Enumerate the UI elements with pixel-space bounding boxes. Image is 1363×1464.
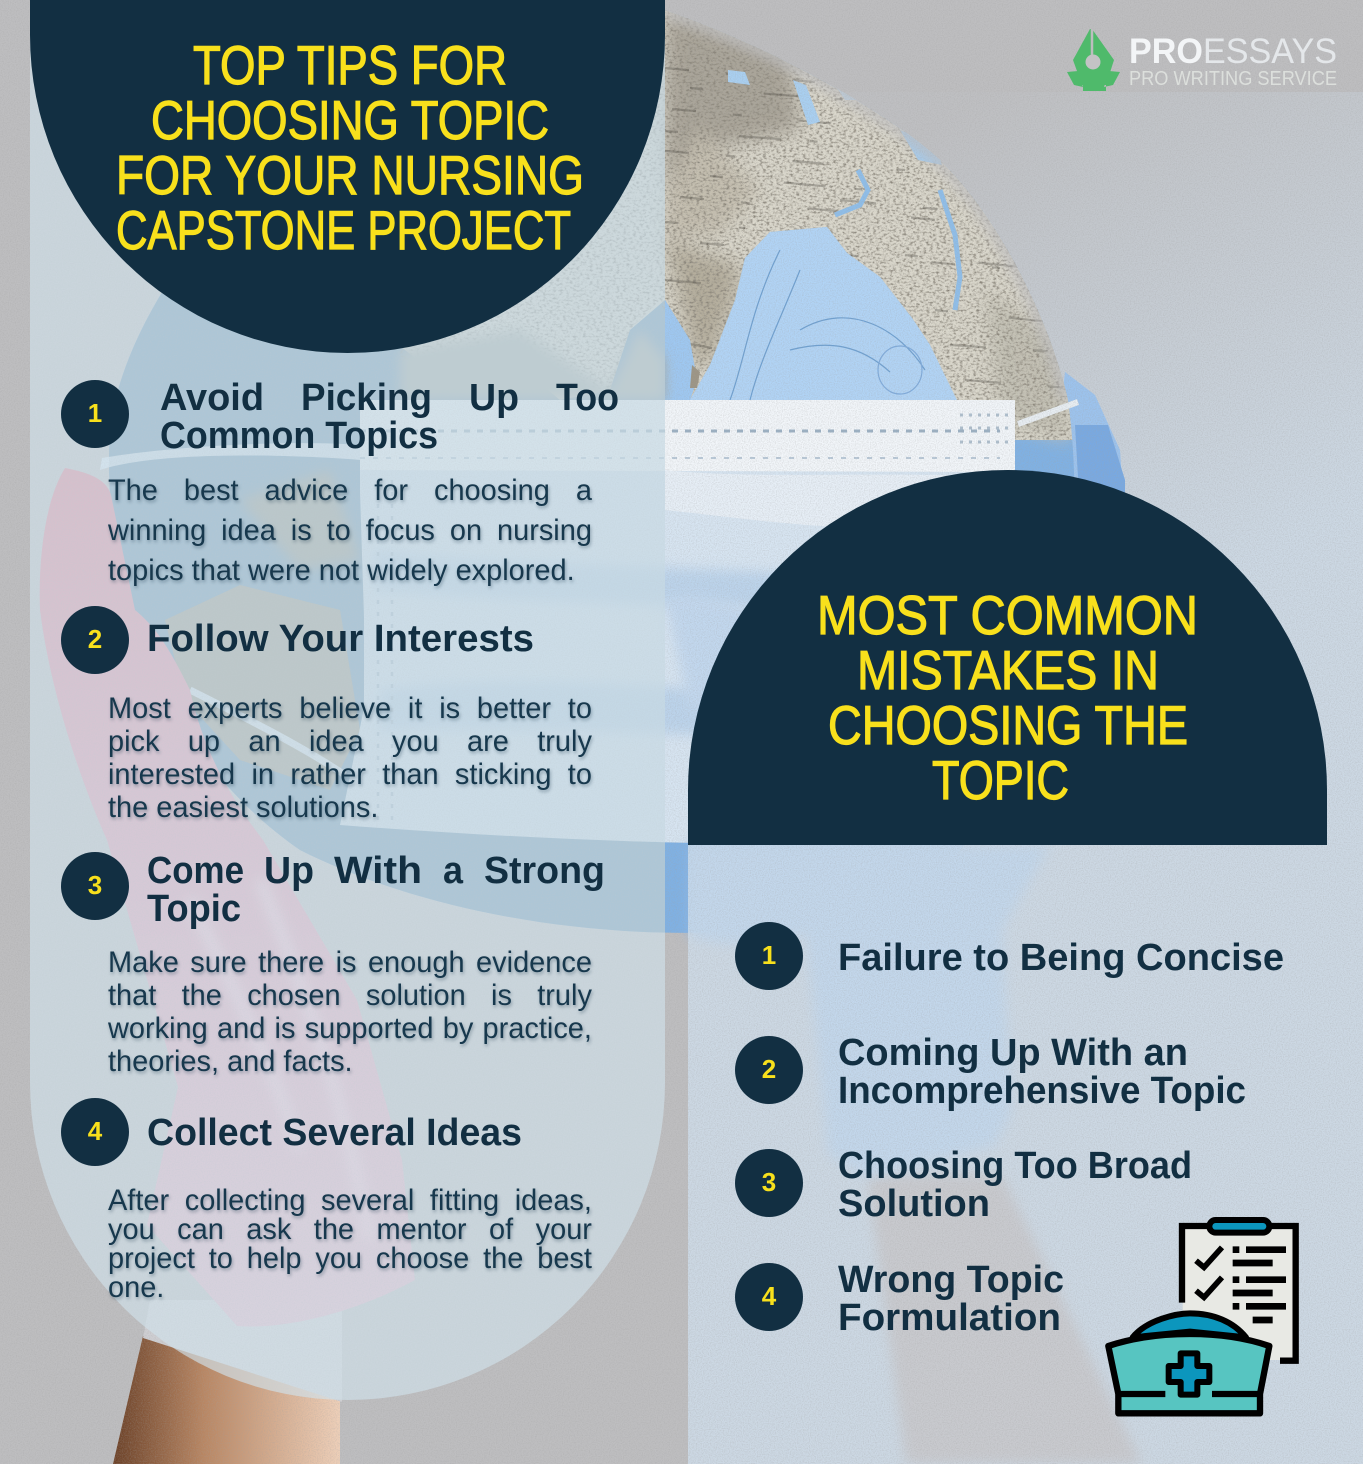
tip 3 [61, 850, 605, 1078]
tip 1 text: winning idea is to focus on nursing [108, 514, 592, 547]
tip 3 text: theories, and facts. [108, 1045, 353, 1078]
mistake 2 [735, 1032, 1246, 1112]
mistake 3: Solution [838, 1183, 990, 1225]
mistake 4: 4 [762, 1281, 777, 1311]
tip 4 number badge [61, 1098, 129, 1166]
tip 4 text: project to help you choose the best [108, 1242, 592, 1275]
tip 1 heading: Common Topics [160, 415, 438, 457]
heading: common mistakes title: CHOOSING THE [828, 694, 1188, 756]
tip 2 [61, 606, 594, 824]
tip 3 text [108, 946, 594, 1078]
tip 2 text: interested in rather than sticking to [108, 758, 592, 791]
tip 2 text: the easiest solutions. [108, 791, 378, 824]
mistake 1: 1 [762, 940, 776, 970]
right glove [689, 845, 1050, 1178]
heading: top tips title: CAPSTONE PROJECT [116, 199, 571, 261]
heading: top tips title: TOP TIPS FOR [193, 34, 507, 96]
tip 1 text: topics that were not widely explored. [108, 554, 575, 587]
tip 2 heading: Follow Your Interests [147, 618, 534, 660]
heading: common mistakes title [688, 470, 1327, 845]
mistake 1: Failure to Being Concise [838, 937, 1284, 979]
tip 3 heading [147, 850, 605, 930]
tip 3 heading: With [334, 850, 422, 892]
right column veil [688, 92, 1363, 1464]
mistake 3: 3 [762, 1167, 776, 1197]
tip 3 number badge: 3 [88, 870, 102, 900]
mistake 3 [735, 1145, 1192, 1225]
heading: top tips title: FOR YOUR NURSING [116, 144, 584, 206]
right forearm [867, 1175, 1142, 1464]
tip 3 number badge [61, 852, 129, 920]
globe above veil [688, 156, 1125, 732]
tip 2 number badge: 2 [88, 624, 102, 654]
tip 4 text: you can ask the mentor of your [108, 1213, 592, 1246]
tip 2 text [108, 692, 594, 824]
tip 4 heading: Collect Several Ideas [147, 1112, 522, 1154]
tip 3 heading: Come [147, 850, 244, 892]
logo nib [1067, 29, 1120, 91]
tip 3 heading: Topic [147, 888, 241, 930]
heading: common mistakes title: TOPIC [932, 749, 1069, 811]
heading: common mistakes title: MOST COMMON [817, 584, 1198, 646]
panel: common mistakes [688, 470, 1327, 1339]
tip 1 number badge [61, 380, 129, 448]
tip 3 text: that the chosen solution is truly [108, 979, 592, 1012]
tip 4 number badge: 4 [88, 1116, 103, 1146]
tip 1 heading [160, 377, 619, 457]
heading: top tips title: CHOOSING TOPIC [151, 89, 549, 151]
pink glove [40, 468, 415, 1327]
tip 3 heading: Strong [484, 850, 605, 892]
panel: top tips [30, 0, 665, 1400]
mistake 4: Wrong Topic [838, 1259, 1064, 1301]
mistake 2: Incomprehensive Topic [838, 1070, 1246, 1112]
tip 1 heading: Up [469, 377, 519, 419]
heading: top tips title [30, 0, 665, 353]
tip 4 [61, 1098, 594, 1304]
tip 4 text: one. [108, 1271, 164, 1304]
tip 3 heading: Up [264, 850, 314, 892]
logo tagline: PRO WRITING SERVICE [1129, 68, 1337, 90]
mistake 2: 2 [762, 1054, 776, 1084]
tip 1 heading: Picking [301, 377, 432, 419]
globe and mask [100, 0, 1130, 950]
tip 4 text [108, 1184, 594, 1304]
mistake 4 [735, 1259, 1064, 1339]
tip 1 text: The best advice for choosing a [108, 474, 592, 507]
tip 1 heading: Too [556, 377, 619, 419]
mistake 2: Coming Up With an [838, 1032, 1188, 1074]
tip 2 text: pick up an idea you are truly [108, 725, 592, 758]
tip 3 heading: a [443, 850, 464, 892]
forearm left [113, 1336, 340, 1464]
tip 1 heading: Avoid [160, 377, 264, 419]
mistake 3: Choosing Too Broad [838, 1145, 1192, 1187]
logo wordmark: PROESSAYS [1129, 32, 1337, 71]
icon: nurse cap and clipboard [1105, 1217, 1299, 1416]
mistake 1 [735, 922, 1284, 990]
tip 3 text: Make sure there is enough evidence [108, 946, 592, 979]
mistake 4: Formulation [838, 1297, 1061, 1339]
tip 1 text [108, 474, 594, 590]
tip 3 text: working and is supported by practice, [108, 1012, 592, 1045]
tip 4 text: After collecting several fitting ideas, [108, 1184, 592, 1217]
tip 2 number badge [61, 606, 129, 674]
tip 1 number badge: 1 [88, 398, 102, 428]
tip 1 [61, 377, 619, 590]
heading: common mistakes title: MISTAKES IN [857, 639, 1159, 701]
logo: ProEssays [1067, 29, 1337, 91]
tip 2 text: Most experts believe it is better to [108, 692, 592, 725]
